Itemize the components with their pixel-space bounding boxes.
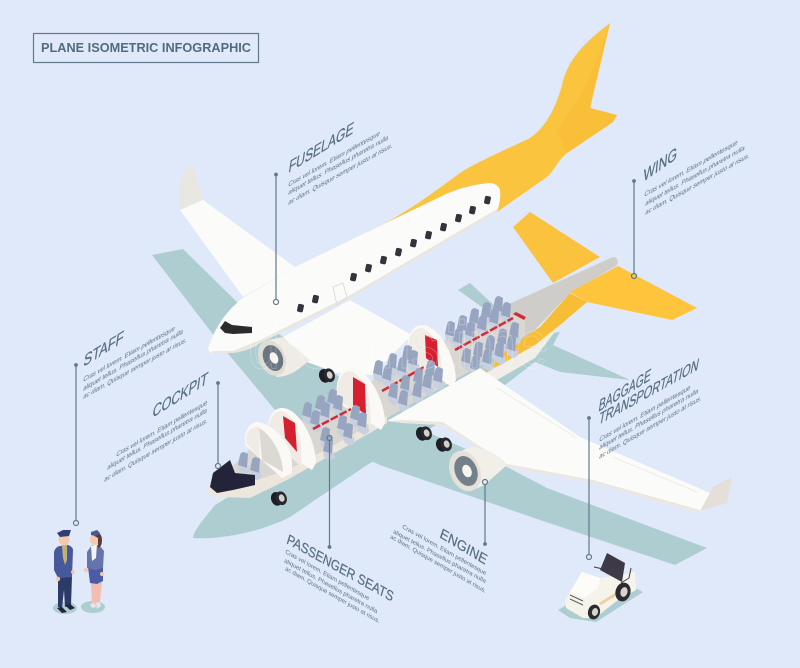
- far winglet: [179, 163, 203, 209]
- cockpit window: [220, 321, 252, 334]
- label: staff: aliquet tellus. Phasellus pharetra nulla: [83, 328, 184, 393]
- cart body: [565, 572, 636, 618]
- label: passenger seats: Cras vel lorem. Etiam pellentesque: [284, 549, 370, 602]
- plane: full exterior: [179, 23, 617, 384]
- far stabilizer: [513, 212, 600, 283]
- cart seat: [600, 553, 625, 582]
- near wing root of exterior plane: [283, 300, 412, 375]
- label: staff: Cras vel lorem. Etiam pellentesque: [83, 325, 176, 384]
- label: engine: Cras vel lorem. Etiam pellentesque: [401, 524, 487, 577]
- leader: engine: [482, 480, 488, 545]
- cart rail: [594, 567, 631, 583]
- leader: cockpit: [216, 382, 220, 468]
- leader: staff: [74, 364, 78, 526]
- seats: front cabin: [302, 389, 369, 461]
- red door 2: [283, 416, 297, 452]
- label: fuselage: [287, 119, 393, 207]
- far engine: [253, 336, 310, 380]
- arch 1: [245, 422, 292, 478]
- yellow tail underside: [483, 293, 587, 373]
- watermark: dreamstime: [248, 307, 548, 383]
- label: cockpit: [104, 369, 209, 484]
- label: cockpit: aliquet tellus. Phasellus pharetra nulla: [107, 407, 208, 472]
- white fuselage: [208, 183, 500, 353]
- plane ground shadow: [152, 249, 707, 565]
- label: cockpit: COCKPIT: [151, 369, 209, 422]
- label: cockpit: Cras vel lorem. Etiam pellentesque: [116, 399, 208, 459]
- label: engine: ac diam. Quisque semper justo at risus.: [389, 534, 487, 595]
- leader: wing: [632, 180, 636, 278]
- aisle end marker: [513, 312, 526, 320]
- label: engine: ENGINE: [438, 526, 489, 568]
- title: PLANE ISOMETRIC INFOGRAPHIC: [41, 40, 252, 55]
- label: passenger seats: PASSENGER SEATS: [285, 531, 395, 605]
- label: baggage transportation: ac diam. Quisque semper justo at risus.: [599, 394, 702, 461]
- cabin windows: [297, 196, 491, 313]
- seats: cockpit: [238, 452, 262, 480]
- cart rear wheel: [613, 581, 633, 603]
- red door 4: [425, 335, 438, 367]
- near winglet: [700, 477, 732, 511]
- floor edge: [208, 416, 387, 498]
- arch 2: [268, 408, 316, 470]
- near engine: [443, 446, 507, 496]
- near wing: [387, 368, 710, 513]
- label: baggage transportation: aliquet tellus. Phasellus pharetra nulla: [599, 387, 699, 452]
- label: fuselage: FUSELAGE: [287, 119, 355, 177]
- flap lines: [497, 388, 697, 492]
- cart grille: [570, 595, 583, 605]
- aisle: middle: [382, 367, 424, 391]
- label: engine: aliquet tellus. Phasellus pharetra nulla: [392, 529, 487, 585]
- label: staff: STAFF: [82, 328, 125, 371]
- label: wing: Cras vel lorem. Etiam pellentesque: [644, 139, 738, 199]
- flight attendant: [81, 530, 105, 613]
- label: wing: ac diam. Quisque semper justo at risus.: [645, 152, 750, 217]
- label: baggage transportation: [597, 355, 702, 461]
- label: wing: [643, 139, 750, 217]
- label: wing: aliquet tellus. Phasellus pharetra nulla: [645, 144, 745, 208]
- tail fin shading: [556, 23, 617, 153]
- leader: fuselage: [274, 173, 278, 304]
- label: passenger seats: ac diam. Quisque semper justo at risus.: [284, 566, 381, 625]
- aisle: front: [313, 409, 351, 429]
- rear belly: [483, 325, 560, 380]
- label: cockpit: ac diam. Quisque semper justo at risus.: [104, 417, 208, 484]
- label: fuselage: ac diam. Quisque semper justo at risus.: [288, 142, 393, 207]
- label: passenger seats: aliquet tellus. Phasellus pharetra nulla: [283, 558, 379, 616]
- baggage cart: [558, 553, 643, 622]
- staff figures: [53, 530, 105, 614]
- label: staff: [82, 325, 187, 401]
- near wheels: [414, 425, 434, 442]
- label: baggage transportation: BAGGAGE: [597, 366, 652, 416]
- near stabilizer: [570, 266, 697, 320]
- cart front wheel: [586, 603, 602, 621]
- label: baggage transportation: TRANSPORTATION: [597, 355, 700, 429]
- aisle: rear: [455, 318, 513, 350]
- fuselage underside shading: [212, 209, 497, 353]
- seats: rear cabin: [445, 296, 521, 378]
- leader: passenger seats: [327, 436, 332, 548]
- wing trailing shading: [387, 420, 700, 513]
- far wheel: [317, 367, 337, 384]
- cabin floor: [215, 310, 525, 483]
- gray upper tail interior: [478, 257, 618, 360]
- title: [34, 34, 258, 62]
- cockpit dark interior: [210, 460, 255, 493]
- cart hood top: [570, 572, 600, 598]
- label: wing: WING: [643, 144, 678, 186]
- cart stripe: [600, 590, 630, 604]
- yellow tail section: [357, 23, 617, 237]
- pilot: [53, 530, 77, 614]
- arch 3: [337, 368, 385, 430]
- nose wheel: [269, 490, 289, 507]
- far wing of exterior plane: [180, 200, 295, 297]
- label: fuselage: Cras vel lorem. Etiam pellentesque: [288, 130, 381, 189]
- seats: middle cabin: [373, 345, 445, 413]
- door: [333, 283, 347, 305]
- leader: baggage: [586, 417, 592, 560]
- label: baggage transportation: Cras vel lorem. Etiam pellentesque: [599, 384, 691, 444]
- arch 4: [408, 325, 456, 387]
- label: fuselage: aliquet tellus. Phasellus pharetra nulla: [288, 134, 389, 197]
- label: staff: ac diam. Quisque semper justo at risus.: [83, 336, 187, 401]
- red door 3: [353, 377, 366, 415]
- cart shadow: [558, 588, 643, 622]
- plane: cutaway interior: [208, 212, 732, 513]
